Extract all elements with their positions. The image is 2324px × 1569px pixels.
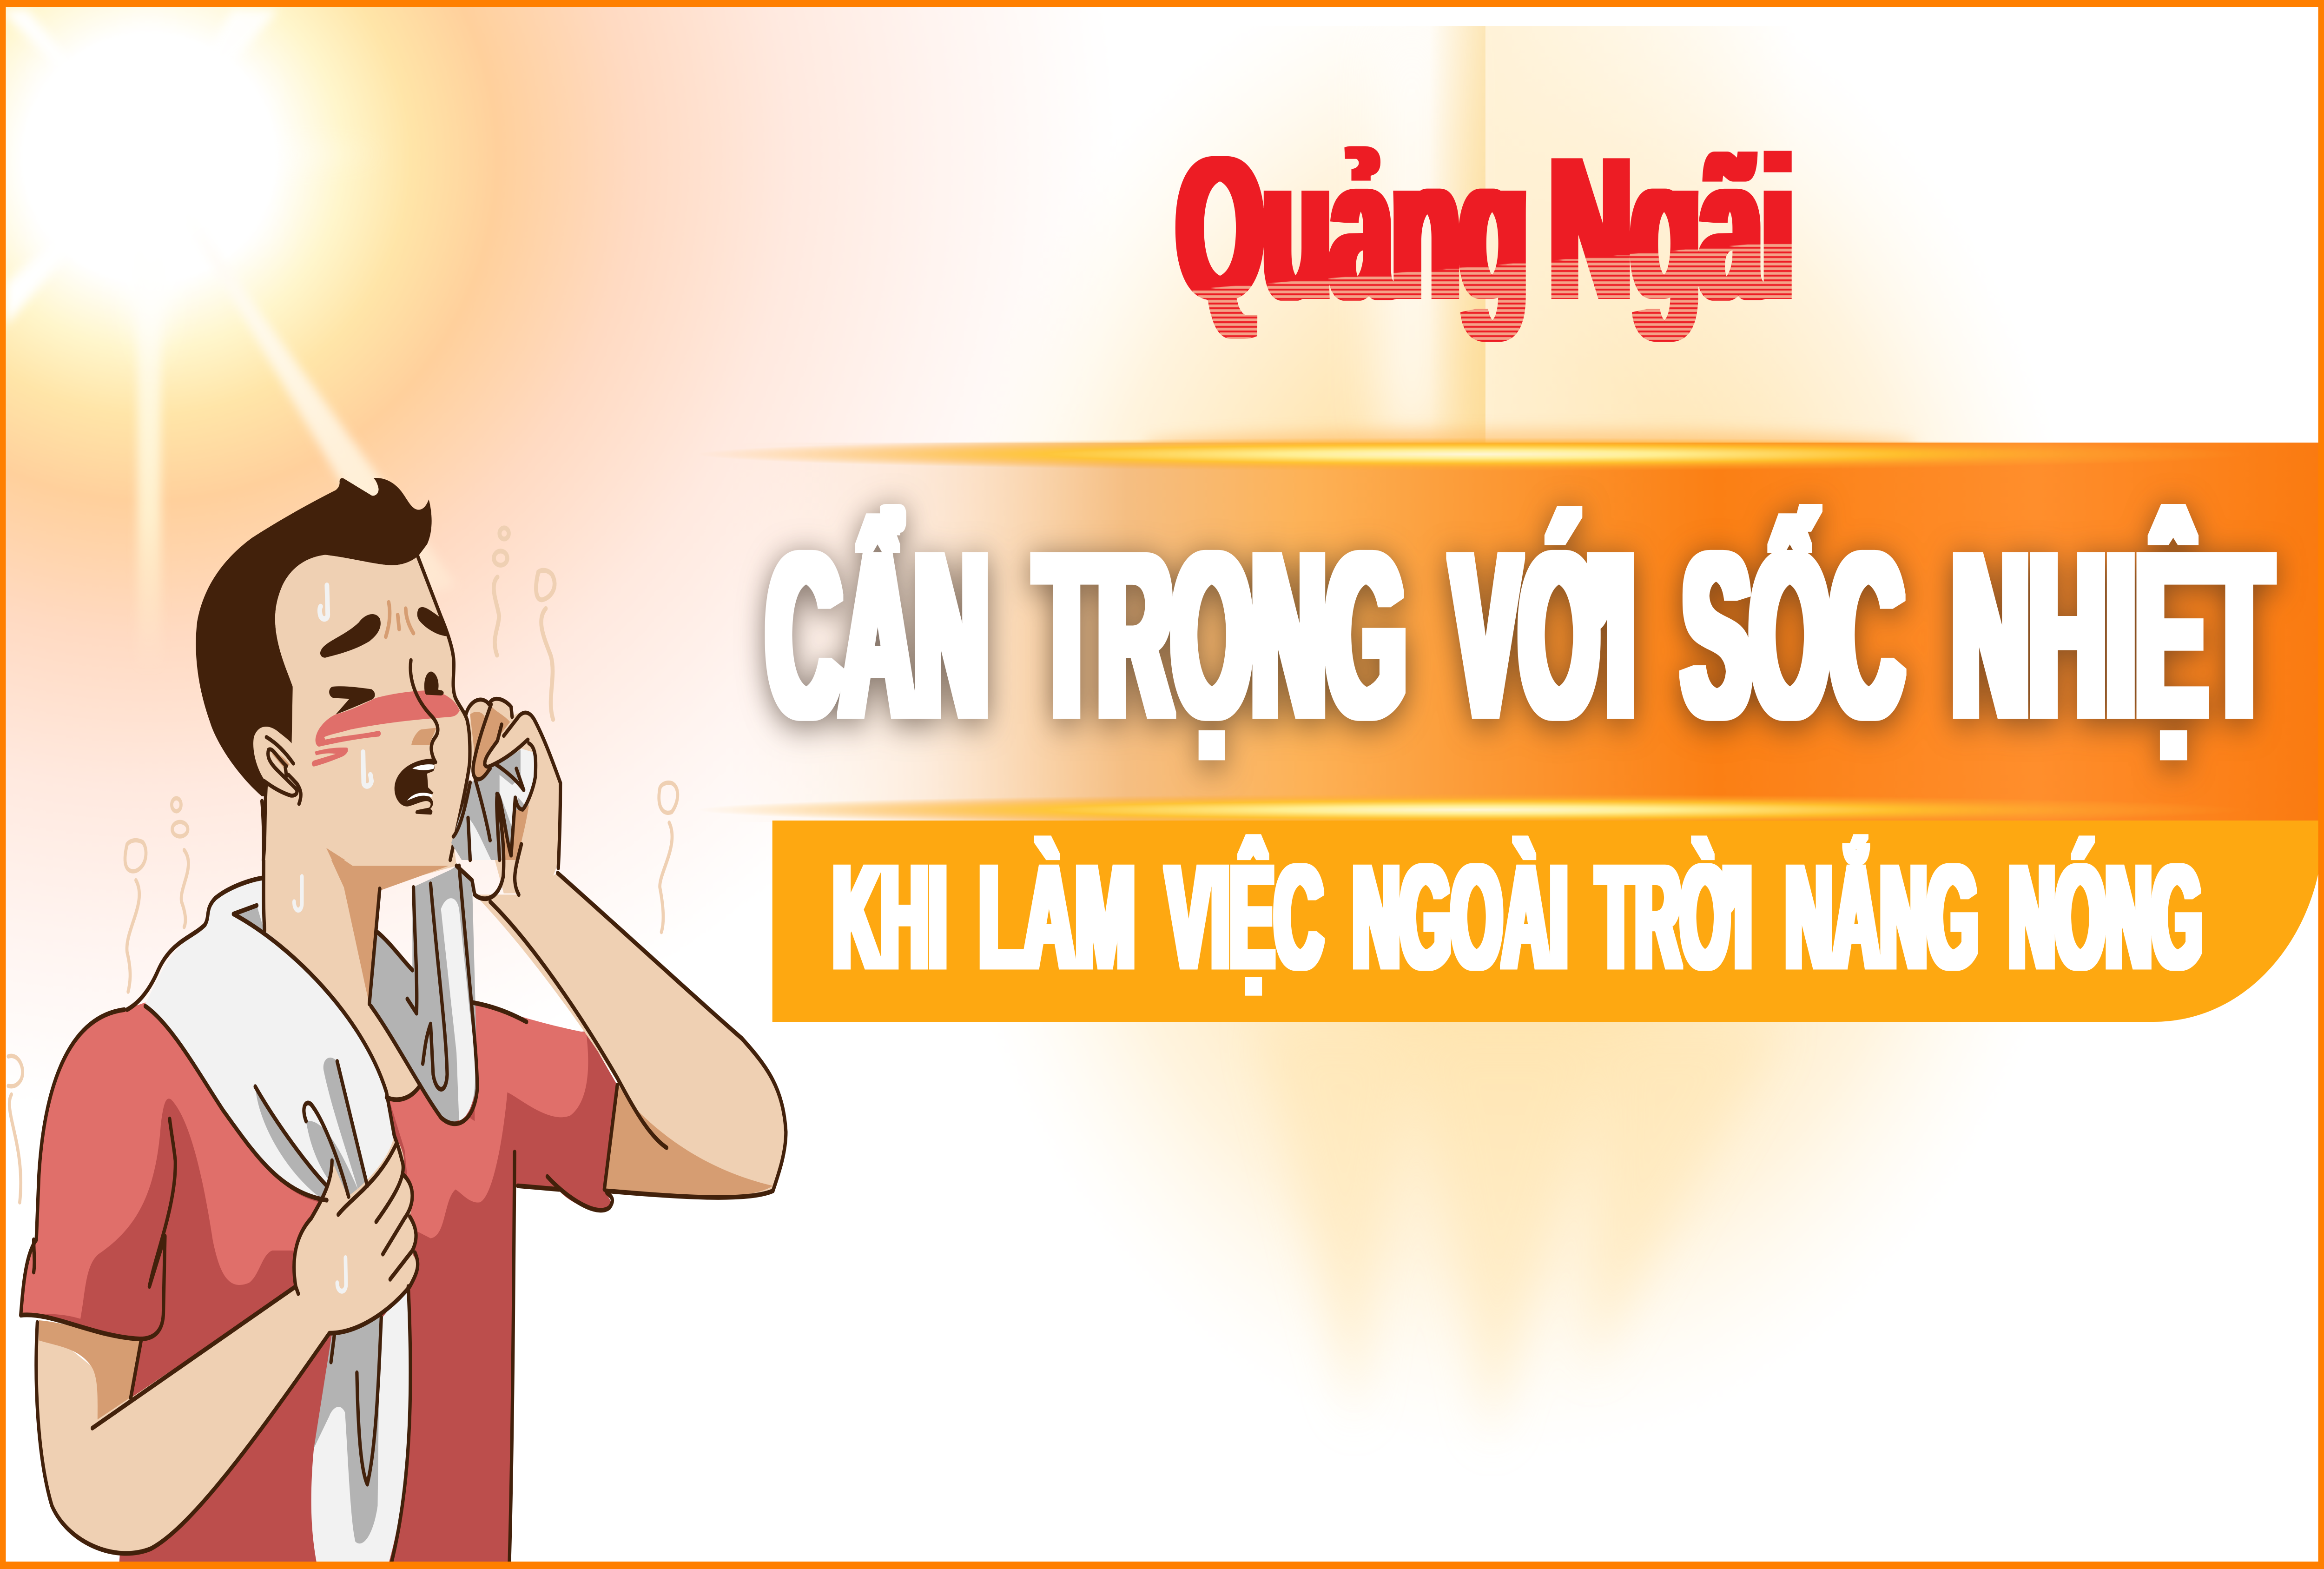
hanging towel bbox=[371, 866, 477, 1122]
subtitle: KHI LÀM VIỆC NGOÀI TRỜI NẮNG NÓNG: NẮNG bbox=[1785, 835, 1978, 999]
ear bbox=[253, 727, 302, 804]
title: CẨN TRỌNG VỚI SỐC NHIỆT: VỚI bbox=[1452, 505, 1635, 765]
subtitle: KHI LÀM VIỆC NGOÀI TRỜI NẮNG NÓNG: VIỆC bbox=[1166, 835, 1323, 999]
closed eye bbox=[329, 686, 375, 715]
forehead wrinkles bbox=[386, 602, 414, 637]
towel back of neck bbox=[145, 878, 398, 1218]
neck shadow bbox=[326, 848, 449, 1002]
face profile outline bbox=[264, 556, 470, 860]
sun halo top left bbox=[0, 0, 1162, 1162]
front arm shadow bbox=[39, 1320, 141, 1419]
front arm bbox=[36, 1135, 417, 1553]
far eye bbox=[424, 672, 444, 695]
subtitle: KHI LÀM VIỆC NGOÀI TRỜI NẮNG NÓNG: TRỜI bbox=[1597, 835, 1752, 999]
subtitle: KHI LÀM VIỆC NGOÀI TRỜI NẮNG NÓNG bbox=[833, 835, 2202, 999]
light streak bottom bbox=[697, 794, 2246, 826]
head layer bbox=[196, 478, 561, 894]
steam near face bbox=[494, 528, 555, 720]
nose shadow bbox=[411, 728, 436, 745]
blush lower bbox=[312, 748, 348, 767]
right arm shadow bbox=[606, 1084, 773, 1197]
hand outlines bbox=[453, 699, 561, 868]
face bbox=[264, 555, 470, 860]
title: CẨN TRỌNG VỚI SỐC NHIỆT: TRỌNG bbox=[1036, 505, 1406, 765]
neck skin bbox=[264, 780, 456, 1099]
shirt highlight right bbox=[389, 1002, 588, 1238]
steam lines left and right bbox=[8, 783, 678, 1202]
towel under hand outline bbox=[456, 794, 522, 899]
subtitle: KHI LÀM VIỆC NGOÀI TRỜI NẮNG NÓNG: LÀM bbox=[979, 835, 1136, 999]
glow seam bbox=[1429, 26, 1486, 444]
neck shadow top bbox=[326, 848, 345, 860]
illustration: sweating man bbox=[8, 478, 786, 1562]
glow top mask with soft white streak bbox=[1379, 26, 1445, 444]
title: CẨN TRỌNG VỚI SỐC NHIỆT: CẨN bbox=[767, 505, 989, 765]
title: CẨN TRỌNG VỚI SỐC NHIỆT: SỐC bbox=[1683, 505, 1903, 765]
logo: Quảng Ngãi: Ngãi bbox=[1550, 115, 1793, 343]
open mouth bbox=[395, 759, 435, 814]
hand behind towel bbox=[470, 699, 561, 894]
shirt highlight left bbox=[21, 1002, 327, 1319]
subtitle bar bbox=[772, 821, 2318, 1022]
subtitle: KHI LÀM VIỆC NGOÀI TRỜI NẮNG NÓNG: NGOÀI bbox=[1353, 835, 1568, 999]
subtitle: KHI LÀM VIỆC NGOÀI TRỜI NẮNG NÓNG: KHI bbox=[833, 835, 947, 999]
fingers shadow bbox=[470, 704, 510, 779]
towel folds shadow bbox=[255, 1058, 367, 1200]
eyebrow left bbox=[320, 614, 381, 658]
eyebrow right bbox=[417, 607, 448, 636]
blush bbox=[316, 690, 460, 747]
glow rays below the bar bbox=[1259, 1022, 1782, 1441]
hanging towel highlight bbox=[441, 898, 475, 1121]
body outlines bbox=[21, 801, 786, 1562]
title: CẨN TRỌNG VỚI SỐC NHIỆT bbox=[767, 505, 2272, 765]
orange title band bbox=[697, 430, 2324, 826]
body layer bbox=[8, 780, 786, 1562]
sun glow centre bbox=[930, 26, 2092, 1467]
light streak top bbox=[697, 437, 2246, 471]
nose outline bbox=[410, 660, 438, 762]
logo: Quảng Ngãi: Quảng bbox=[1177, 115, 1527, 343]
sweat drops on face bbox=[320, 585, 371, 786]
hair bbox=[196, 478, 432, 796]
sun rays top left bbox=[0, 9, 457, 669]
chest towel lower shadow bbox=[314, 1315, 380, 1543]
shirt base bbox=[21, 1002, 617, 1562]
towel in hand bbox=[451, 748, 536, 860]
chest towel lower bbox=[311, 1286, 410, 1562]
sweat drops on body bbox=[294, 846, 550, 1291]
glow right of seam bbox=[1486, 26, 1795, 444]
right arm bbox=[475, 873, 786, 1198]
towel back shadow bbox=[233, 906, 264, 932]
